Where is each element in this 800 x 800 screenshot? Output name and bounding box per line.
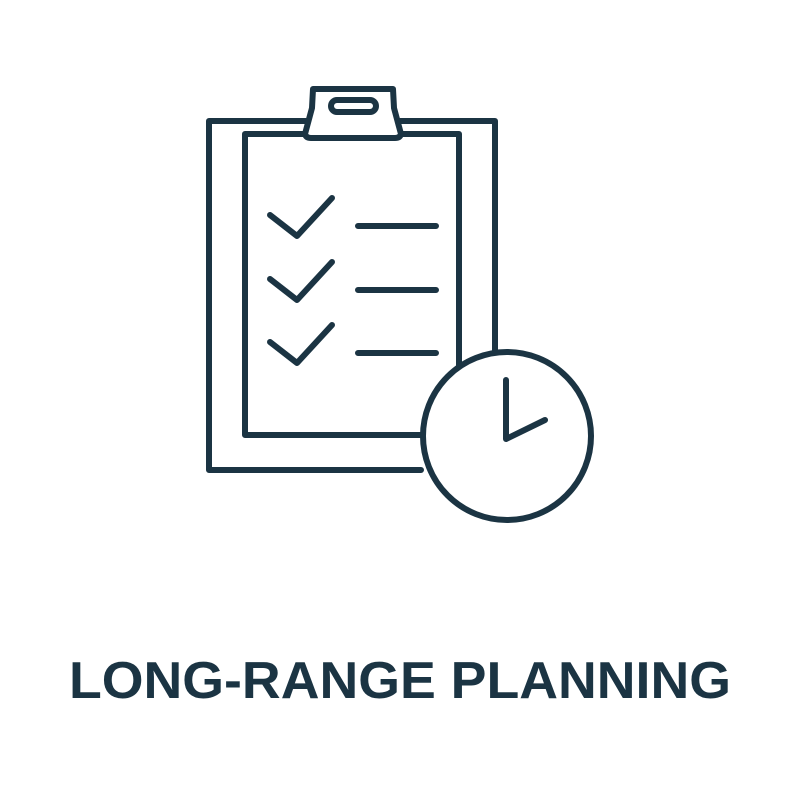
- clipboard inner paper: [245, 134, 459, 435]
- clipboard outer board: [209, 121, 495, 470]
- icon: clipboard with clock: [209, 89, 591, 520]
- checklist: [270, 198, 436, 363]
- clip: [305, 89, 401, 138]
- icon: clock: [423, 352, 591, 520]
- title: LONG-RANGE PLANNING: [69, 652, 731, 710]
